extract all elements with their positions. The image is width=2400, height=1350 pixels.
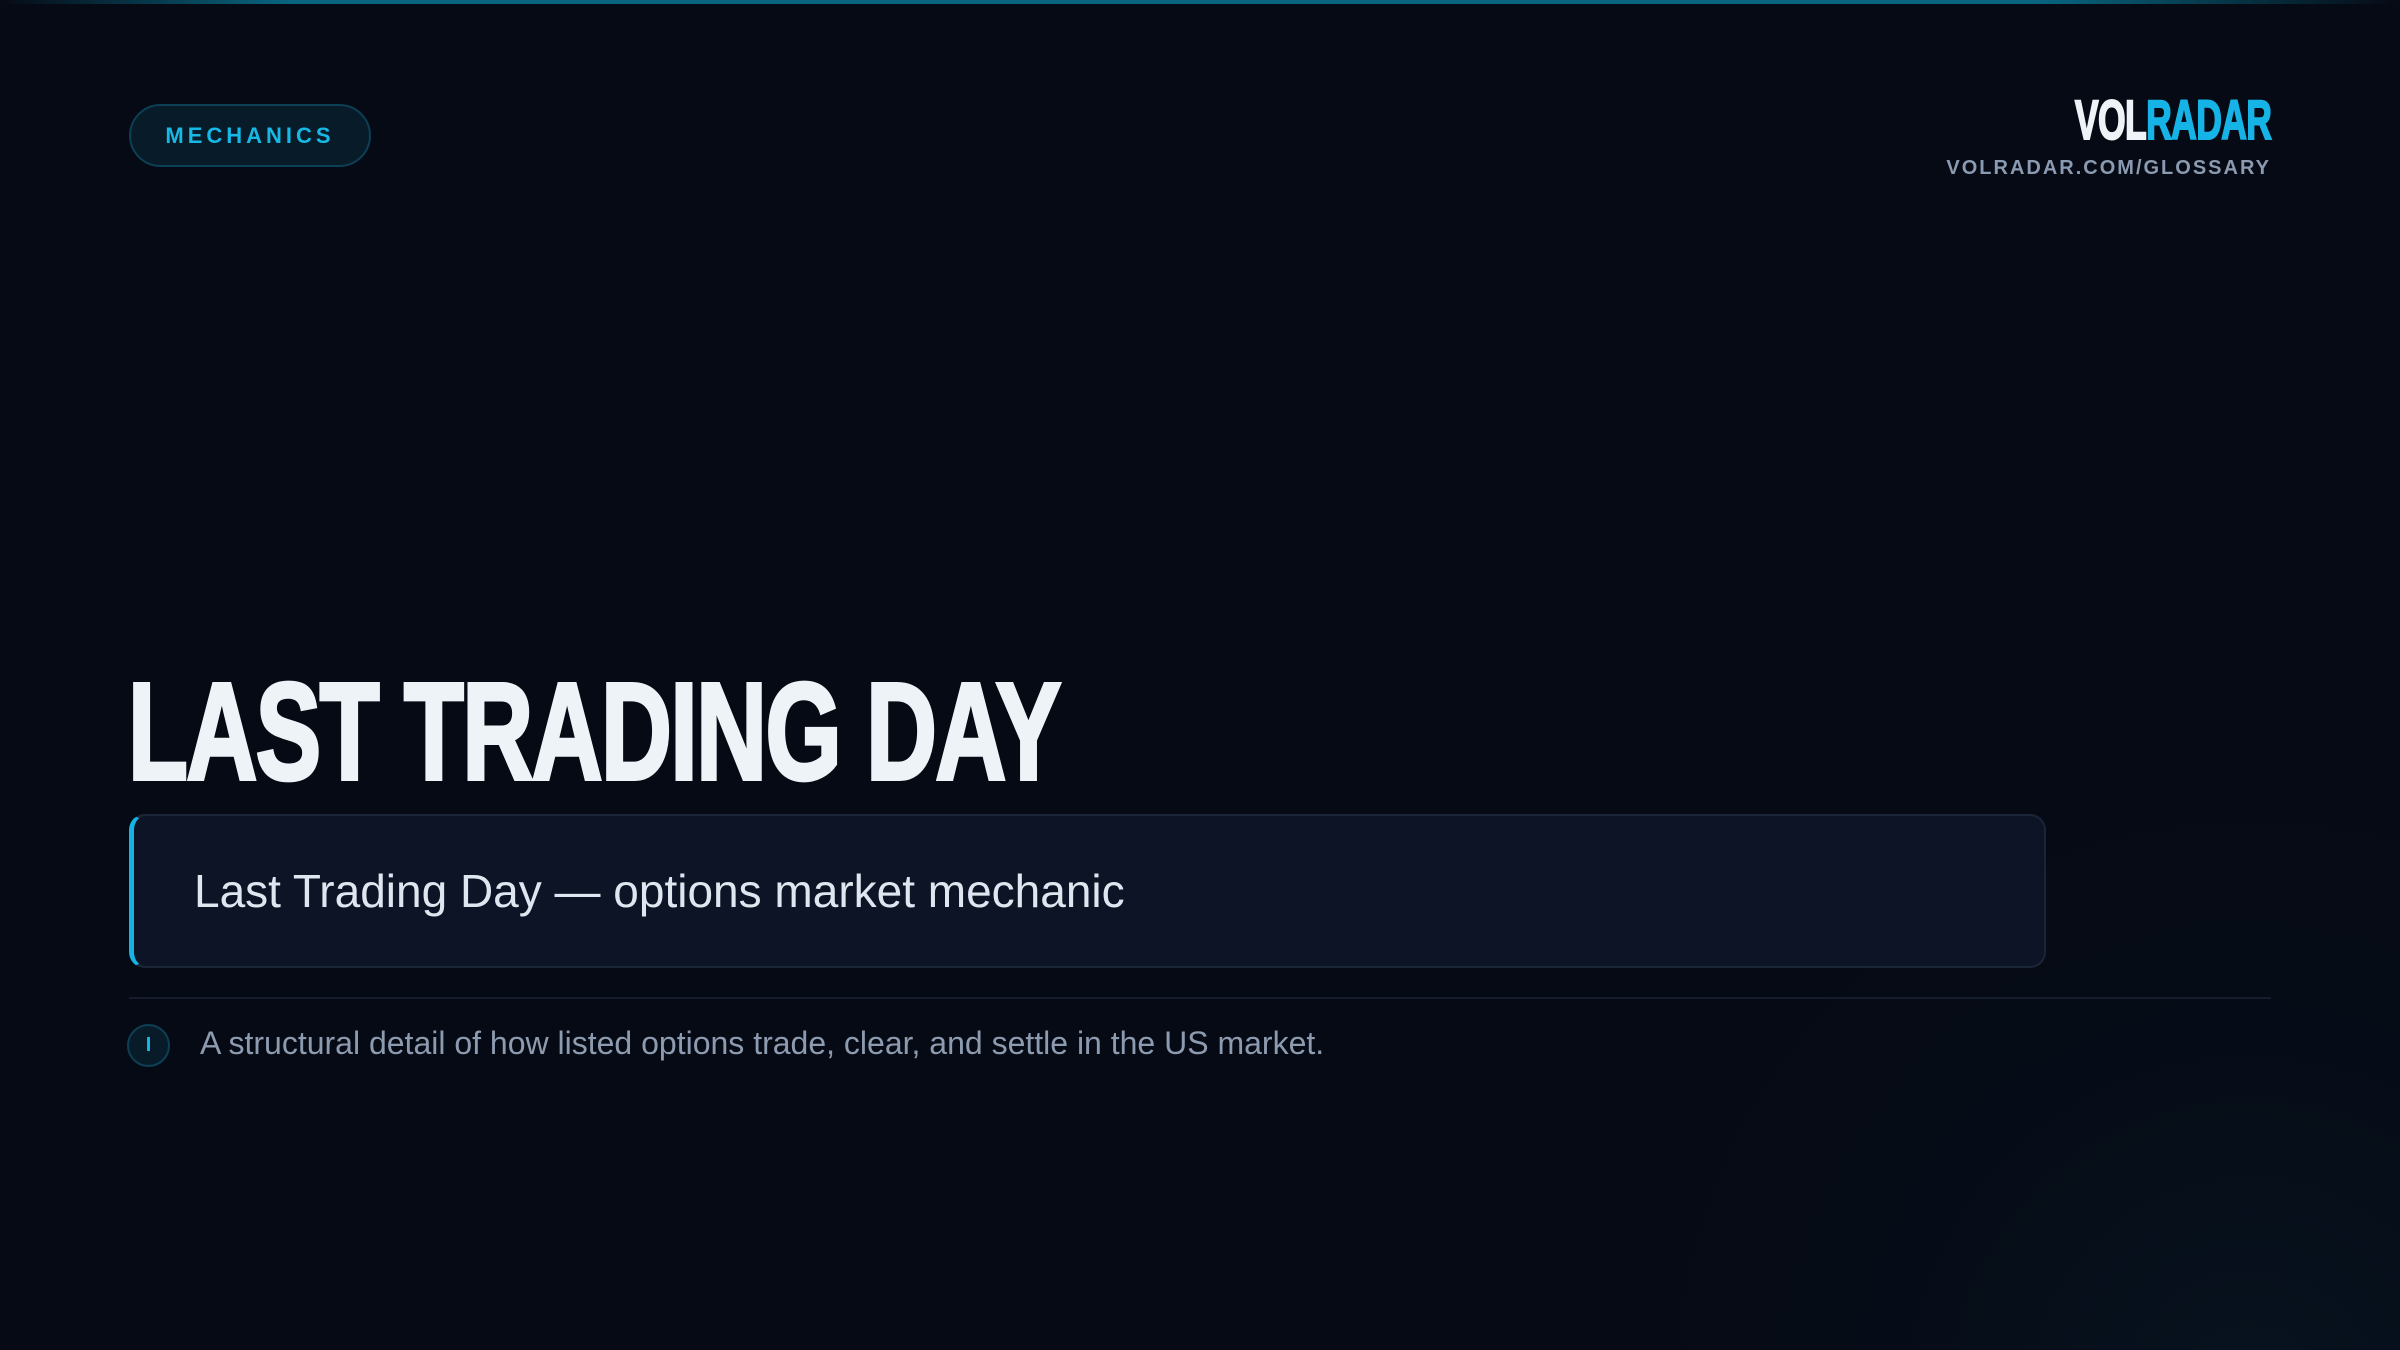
icon: info: I <box>146 1034 151 1056</box>
subtitle box <box>129 814 2046 968</box>
icon: info <box>127 1024 170 1067</box>
tag pill: mechanics <box>129 104 371 167</box>
subtitle text: Last Trading Day — options market mechanic <box>194 865 1125 917</box>
logo: volradar: VOLRADAR <box>2075 88 2271 151</box>
title: LAST TRADING DAY <box>128 655 1060 809</box>
info text: A structural detail of how listed options trade, clear, and settle in the US market. <box>200 1025 1324 1061</box>
tag pill: mechanics: MECHANICS <box>165 122 335 148</box>
url text: VOLRADAR.COM/GLOSSARY <box>1946 157 2271 179</box>
